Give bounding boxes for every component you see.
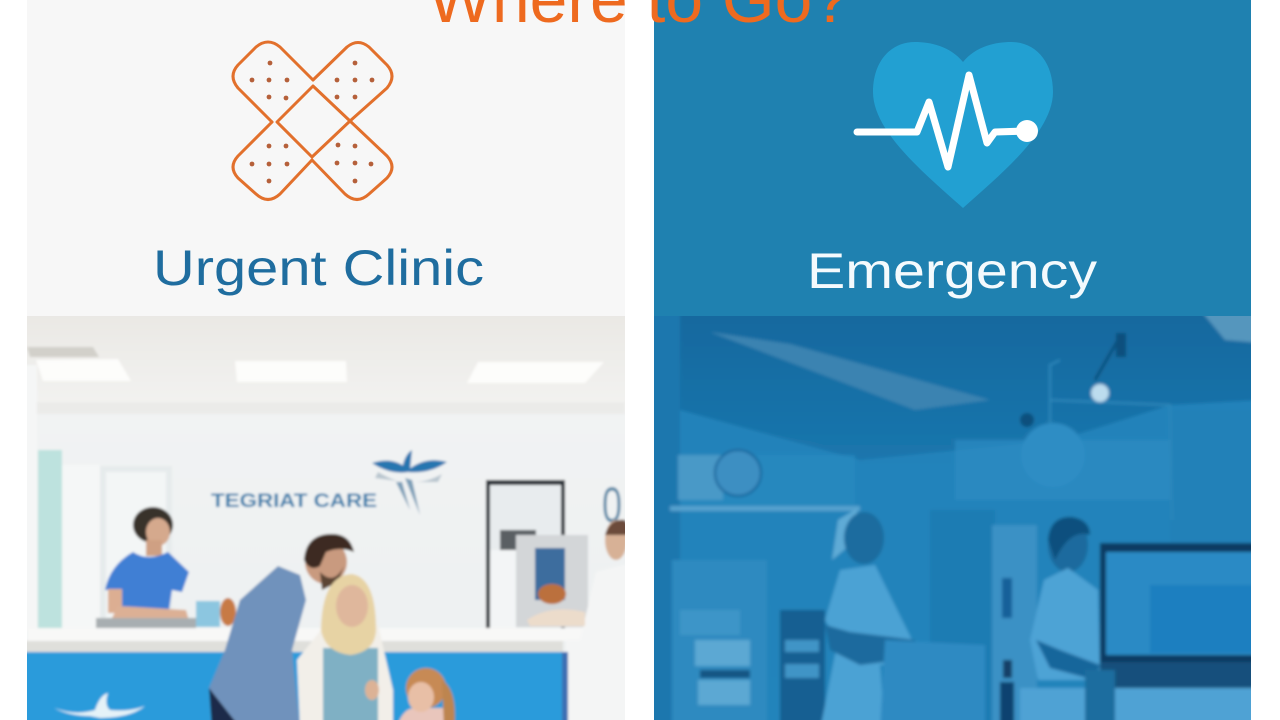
- icon: dragonfly logo: [372, 450, 447, 515]
- reception counter: [17, 628, 602, 720]
- monitor: [1100, 543, 1261, 662]
- door and wall number: [486, 477, 622, 628]
- central column and dispensers: [992, 524, 1038, 720]
- desk items: [96, 598, 236, 629]
- left wall equipment: [670, 450, 860, 720]
- door and wall number: 0: [602, 477, 622, 533]
- person: nurse: [820, 508, 985, 720]
- person: man in denim shirt: [209, 534, 354, 720]
- person: blonde woman: [297, 574, 393, 720]
- machine behind counter: [490, 530, 588, 628]
- icon: counter logo: [54, 693, 145, 718]
- sign: clinic name: TEGRIAT CARE: [211, 491, 377, 512]
- panel: urgent clinic header: [27, 0, 625, 316]
- photo: urgent clinic reception: [17, 306, 635, 720]
- person: doctor: [1030, 517, 1100, 680]
- photo: emergency room blue tint: [644, 306, 1261, 720]
- foreground bed and equipment: [1000, 662, 1261, 720]
- person: doctor in white coat: [527, 520, 635, 720]
- ceiling equipment arm: [1019, 332, 1171, 442]
- person: child: [365, 668, 455, 720]
- panel: emergency header: [654, 0, 1251, 316]
- icon: heart with pulse line: [857, 42, 1053, 208]
- heading: emergency: Emergency: [807, 243, 1097, 299]
- heading: urgent clinic: Urgent Clinic: [153, 240, 484, 296]
- person: nurse in blue scrubs: [105, 507, 190, 624]
- icon: crossed bandages: [233, 42, 392, 200]
